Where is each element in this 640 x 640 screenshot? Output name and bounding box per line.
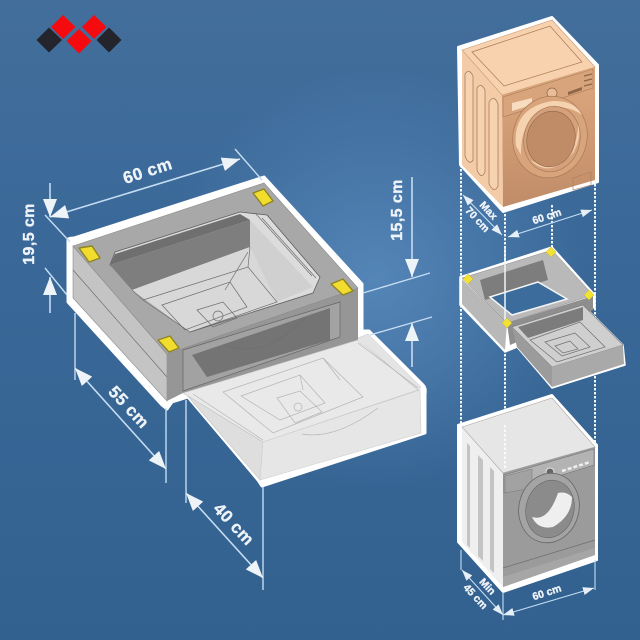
- yellow pads: [79, 189, 353, 352]
- drawer right side wall: [358, 334, 421, 391]
- drawer front: [260, 390, 421, 480]
- drawer opening: [183, 302, 340, 391]
- base line: [503, 540, 595, 568]
- dimension: 55 cm depth: 55 cm: [105, 382, 153, 432]
- top opening: [110, 212, 320, 332]
- lower washer dimensions: 45 cm: [461, 582, 490, 612]
- guide line across the top: [504, 425, 506, 470]
- dashed assembly guide lines: [461, 165, 595, 470]
- main pedestal with drawer: [68, 177, 425, 486]
- drawer handle line: [225, 318, 305, 349]
- dimension: 55 cm depth: [75, 313, 166, 483]
- service hatch: [573, 172, 591, 190]
- outline: [458, 395, 597, 592]
- lower washer dimensions: [461, 550, 595, 620]
- drawer inner surface: [183, 340, 418, 442]
- lower washing machine: [458, 395, 597, 592]
- front face: [503, 447, 595, 587]
- dimension: 19,5 cm height: [21, 183, 67, 313]
- top face: [462, 398, 595, 473]
- lower washer dimensions: 60 cm: [531, 582, 563, 603]
- top washer dimensions: 70 cm: [463, 205, 492, 235]
- drawer front handle: [302, 408, 378, 435]
- drawer front: [552, 345, 624, 387]
- inner back wall: [110, 220, 250, 290]
- inner right wall: [250, 220, 313, 302]
- exploded pedestal with drawer: [460, 246, 625, 388]
- top face: [462, 20, 595, 95]
- door: [511, 467, 587, 549]
- opening through frame: [490, 282, 567, 315]
- drawer back: [518, 307, 583, 338]
- drawer floor details: [193, 343, 418, 440]
- rear rail: [110, 214, 250, 265]
- top washer dimensions: [463, 195, 592, 237]
- dimension: 40 cm drawer depth: 40 cm: [210, 499, 258, 549]
- drawer interior: [512, 305, 623, 367]
- outline: [458, 17, 598, 212]
- logo: [36, 15, 122, 54]
- right rim lines: [256, 214, 316, 278]
- dimension: 60 cm width: [45, 149, 262, 242]
- side slots: [465, 71, 498, 190]
- guide line across the frame: [504, 246, 506, 322]
- top washer dimensions: 60 cm: [531, 206, 563, 227]
- yellow corners: [463, 247, 594, 328]
- inner back wall: [480, 260, 548, 300]
- pedestal front face: [167, 288, 358, 401]
- outline: [460, 247, 625, 388]
- control panel: [504, 449, 594, 493]
- pedestal left face: [73, 246, 167, 401]
- inner floor: [132, 247, 277, 332]
- dimension: 60 cm width: 60 cm: [121, 154, 175, 188]
- top surface: [462, 250, 593, 323]
- dimension: 19,5 cm height: 19,5 cm: [21, 203, 38, 265]
- drawer left side wall: [186, 394, 263, 480]
- door: [504, 88, 596, 186]
- white outline: [68, 177, 425, 486]
- dimension: 40 cm drawer depth: [186, 400, 263, 590]
- drawer side: [512, 327, 552, 387]
- left side: [462, 428, 503, 587]
- left side: [462, 50, 503, 207]
- lower washer dimensions: Min: [477, 576, 498, 598]
- top washing machine in orange tint: [458, 17, 598, 212]
- control panel: [503, 69, 593, 117]
- top washer dimensions: Max: [477, 199, 500, 223]
- dimension: 15,5 cm drawer height: [363, 177, 432, 367]
- drawer back wall: [192, 308, 330, 377]
- side slots: [467, 443, 494, 573]
- drawer floor lines: [530, 322, 605, 362]
- right front side: [507, 296, 593, 345]
- pedestal top face: [73, 183, 358, 354]
- dimension: 15,5 cm drawer height: 15,5 cm: [389, 179, 406, 241]
- left side: [462, 279, 507, 350]
- front face: [502, 67, 595, 207]
